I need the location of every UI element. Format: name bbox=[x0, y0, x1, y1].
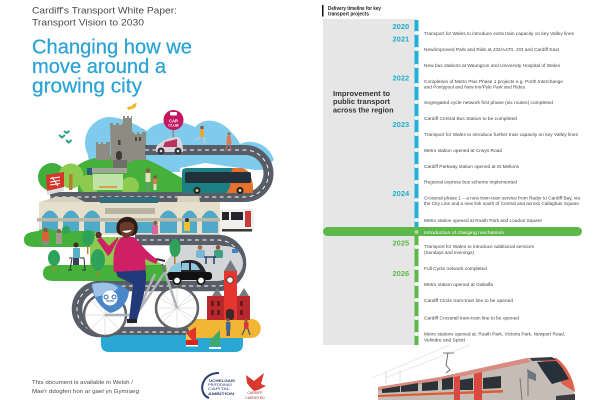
milestones: 2025 to 2026: Full Cycle network completed bbox=[424, 266, 487, 271]
title: growing city bbox=[32, 76, 142, 98]
milestones: 2020 to 2024: the City Line and a new link south of Central and across Callaghan Square bbox=[424, 201, 579, 206]
bicycle bbox=[84, 259, 198, 336]
milestones: 2025 to 2026: (Sundays and evenings) bbox=[424, 250, 474, 255]
car club sign: CLUB bbox=[168, 124, 179, 128]
panel heading bbox=[333, 89, 394, 114]
beach bbox=[184, 319, 261, 338]
welsh availability note: This document is available in Welsh / bbox=[32, 380, 134, 386]
timeline line bbox=[414, 20, 418, 345]
tram bbox=[220, 209, 254, 232]
milestones: 2025 to 2026: Metro stations opened at: Roath Park, Victoria Park, Newport Road, bbox=[424, 332, 565, 336]
sky clouds bbox=[85, 117, 274, 172]
subtitle: Transport Vision to 2030 bbox=[32, 17, 144, 27]
title: move around a bbox=[32, 56, 167, 78]
year labels: 2021 bbox=[392, 34, 409, 44]
panel: grey region bbox=[323, 19, 416, 345]
year labels: 2020 bbox=[392, 22, 409, 31]
year labels: 2026 bbox=[392, 269, 409, 278]
water bbox=[101, 335, 243, 352]
milestones: 2020 to 2024: and Pontypool and New Inn/Pyle Park and Rides bbox=[424, 84, 526, 90]
milestones: 2020 to 2024: Cardiff Central Bus Station to be completed bbox=[424, 116, 517, 121]
hill bbox=[78, 155, 182, 195]
logo: cardiff council: CARDIFF bbox=[247, 391, 263, 395]
pedestrians on road bbox=[196, 126, 232, 151]
charging mechanism bar bbox=[323, 227, 582, 236]
woman riding bicycle bbox=[95, 217, 158, 326]
timeline heading bbox=[322, 5, 381, 18]
castle bbox=[96, 116, 146, 168]
logo: cardiff council: CAERDYDD bbox=[245, 396, 265, 400]
trees bbox=[48, 226, 180, 277]
milestones: 2020 to 2024: Metro station opened at Roath Park and Loudon Square bbox=[424, 218, 542, 223]
people in park bbox=[42, 228, 86, 270]
logo: cardiff council bbox=[245, 373, 266, 400]
year labels: 2023 bbox=[392, 120, 409, 129]
panel heading: across the region bbox=[333, 106, 394, 114]
logo: capital ambition: AMBITION bbox=[208, 392, 234, 396]
beach people and boats bbox=[186, 318, 250, 349]
milestones: 2020 to 2024: New bus stations at Waungron and University Hospital of Wales bbox=[424, 63, 561, 68]
milestones: 2020 to 2024: Metro station opened at Crwys Road bbox=[424, 148, 502, 153]
timeline heading: transport projects bbox=[328, 12, 369, 18]
milestones: 2020 to 2024: Regional express bus scheme implemented bbox=[424, 180, 517, 184]
rail sign bbox=[46, 172, 64, 195]
car club sign bbox=[164, 110, 184, 140]
milestones: 2025 to 2026: Transport for Wales to introduce additional services bbox=[424, 244, 535, 249]
cafe table people bbox=[196, 245, 238, 264]
title: Changing how we bbox=[32, 36, 192, 58]
subtitle: Cardiff's Transport White Paper: bbox=[32, 6, 177, 16]
birds bbox=[59, 131, 72, 142]
milestones: 2025 to 2026: Cardiff Crossrail tram-train line to be opened bbox=[424, 316, 519, 320]
milestones: 2020 to 2024: Cardiff Parkway station opened at St Mellons bbox=[424, 164, 520, 169]
charging mechanism bar: Introduction of charging mechanism bbox=[424, 230, 504, 235]
timeline heading: Delivery timeline for key bbox=[328, 6, 381, 12]
grey plaza bbox=[165, 246, 243, 280]
top road bbox=[50, 150, 268, 197]
year labels: 2024 bbox=[392, 189, 410, 198]
milestones: 2020 to 2024: New/improved Park and Ride at J32/A470, J33 and Cardiff East bbox=[424, 47, 560, 52]
logo: capital ambition: PRIFDDINAS bbox=[208, 383, 232, 387]
people waiting bbox=[146, 168, 157, 191]
milestones: 2025 to 2026: Velindre and Splott bbox=[424, 338, 466, 342]
car bbox=[156, 137, 183, 154]
milestones: 2020 to 2024: Crossrail phase 1 – a new tram-train service from Radyr to Cardiff Bay, via bbox=[424, 196, 580, 200]
middle road bbox=[77, 240, 241, 332]
car club sign: CAR bbox=[169, 118, 178, 124]
milestones: 2025 to 2026 bbox=[424, 244, 565, 342]
title bbox=[32, 36, 192, 98]
station building bbox=[37, 196, 221, 235]
year labels: 2022 bbox=[392, 74, 409, 82]
milestones: 2025 to 2026: Metro station opened at Gabalfa bbox=[424, 282, 493, 287]
logo: capital ambition: UCHELGAIS bbox=[209, 379, 236, 383]
milestones: 2020 to 2024: Transport for Wales to introduce extra train capacity on key Valley lines bbox=[424, 31, 575, 36]
milestones: 2025 to 2026: Cardiff Circle tram-train line to be opened bbox=[424, 298, 513, 303]
welsh availability note: Mae'r ddogfen hon ar gael yn Gymraeg bbox=[32, 389, 139, 395]
timeline dots bbox=[414, 31, 418, 336]
trees by station bbox=[38, 163, 139, 195]
illustration: city transport scene bbox=[24, 103, 274, 352]
milestones: 2020 to 2024: Completion of Metro Plus Phase 1 projects e.g. Porth Interchange bbox=[424, 79, 563, 84]
panel heading: Improvement to bbox=[333, 89, 391, 98]
milestones: 2020 to 2024: Transport for Wales to introduce further train capacity on key Valley lines bbox=[424, 132, 579, 137]
bus shelter bbox=[87, 168, 127, 190]
milestones: 2020 to 2024 bbox=[424, 31, 580, 223]
panel heading: public transport bbox=[333, 97, 391, 106]
green lawns bbox=[24, 229, 125, 247]
milestones: 2020 to 2024: Segregated cycle network first phase (six routes) completed bbox=[424, 100, 553, 105]
year labels bbox=[392, 22, 410, 278]
logo: capital ambition: CAPITAL bbox=[208, 387, 230, 391]
city hall bbox=[207, 260, 250, 320]
train photo bbox=[372, 345, 575, 400]
year labels: 2025 bbox=[392, 238, 409, 248]
subtitle bbox=[32, 6, 177, 27]
logo: capital ambition bbox=[202, 373, 236, 398]
balloon bbox=[127, 103, 137, 110]
cyclists by station bbox=[152, 218, 190, 234]
welsh availability note bbox=[32, 380, 139, 395]
taxi bbox=[167, 260, 212, 284]
bus bbox=[182, 168, 253, 194]
